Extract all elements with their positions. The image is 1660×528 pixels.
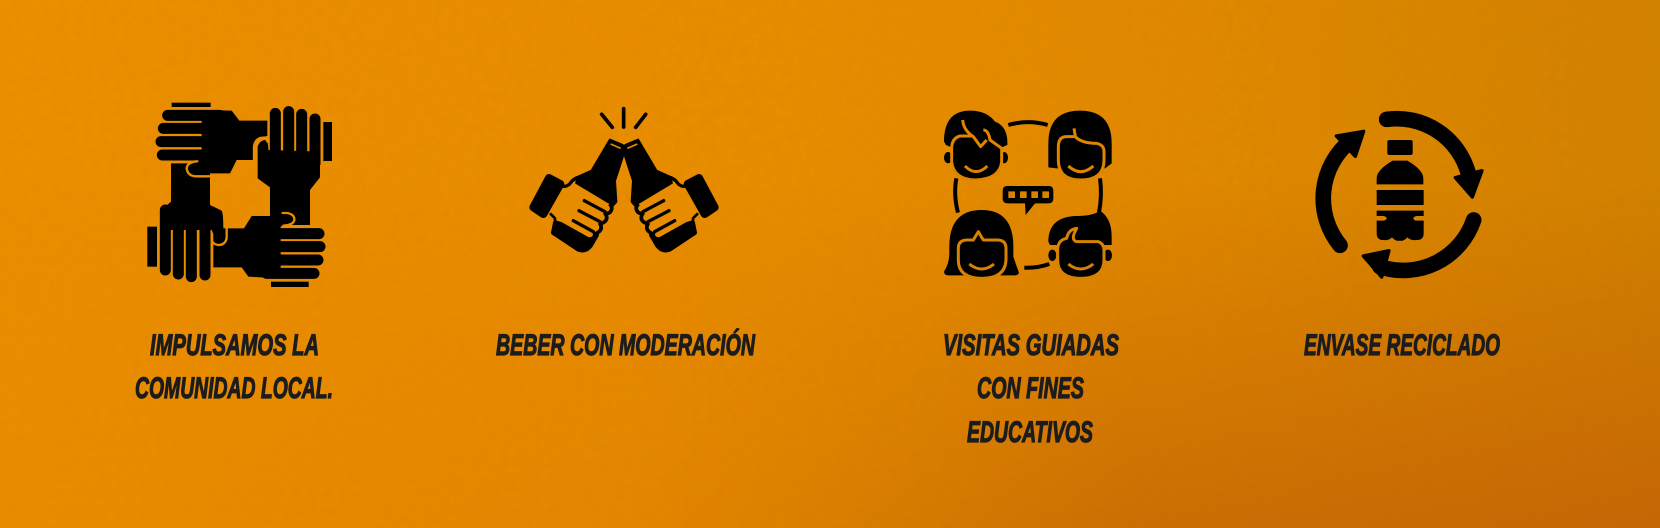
label: visitas guiadas con fines educativos: EDUCATIVOS: [967, 416, 1093, 449]
column: community hands: [135, 103, 333, 405]
column: recycled packaging: [1304, 119, 1500, 362]
column: guided visits: [943, 111, 1119, 449]
icon: bottle inside recycling arrows: [1323, 119, 1482, 277]
dashed ring: [955, 122, 1101, 268]
plastic bottle: [1377, 140, 1424, 241]
label: visitas guiadas con fines educativos: CON FINES: [977, 372, 1084, 405]
right fist and bottle: [625, 140, 715, 250]
person: top left: [944, 111, 1008, 180]
label: impulsamos la comunidad local: IMPULSAMOS LA: [150, 329, 319, 362]
speech bubble: [1003, 186, 1053, 215]
left fist and bottle: [533, 140, 623, 250]
label: beber con moderación: BEBER CON MODERACIÓN: [496, 328, 756, 362]
label: visitas guiadas con fines educativos: VISITAS GUIADAS: [943, 329, 1119, 362]
icon: two bottles toasting: [533, 109, 715, 250]
label: envase reciclado: ENVASE RECICLADO: [1304, 329, 1500, 362]
person: top right: [1048, 111, 1112, 180]
column: responsible drinking: [496, 109, 756, 362]
label: impulsamos la comunidad local: COMUNIDAD LOCAL.: [135, 372, 333, 405]
label: visitas guiadas con fines educativos: [943, 329, 1119, 449]
recycling arrows: [1323, 119, 1482, 277]
person: bottom right: [1048, 211, 1112, 278]
background: orange textured wall: [552, 0, 1660, 528]
person: bottom left: [944, 210, 1019, 278]
icon: four people in conversation: [944, 111, 1112, 278]
icon: four interlocked hands: [147, 103, 332, 287]
label: impulsamos la comunidad local: [135, 329, 333, 405]
